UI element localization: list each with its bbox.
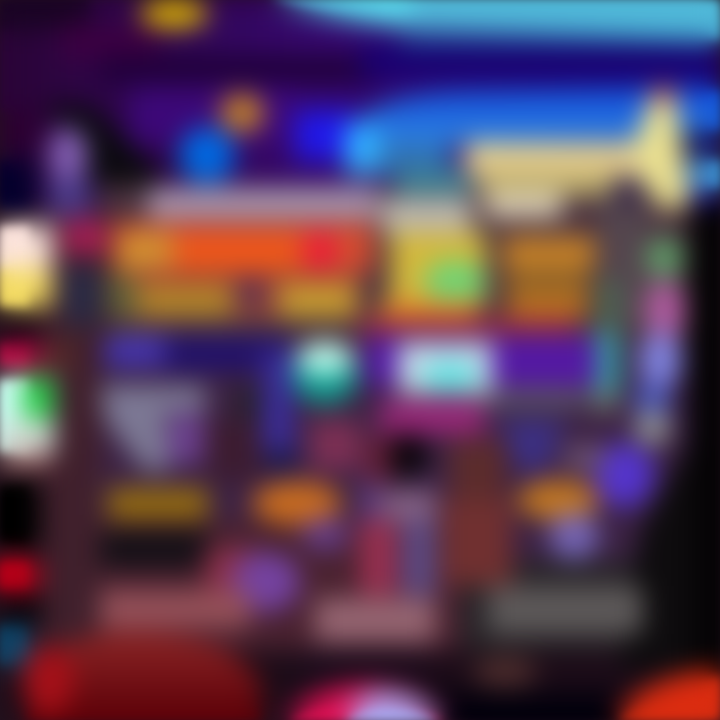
panel: marquee top	[148, 188, 378, 219]
background: cabinet body	[0, 185, 720, 720]
icon: right red dome	[614, 668, 720, 720]
panel: red and orange sign	[108, 222, 374, 318]
panel: left lower gap	[0, 600, 42, 667]
icon: centre red and white dome	[284, 684, 449, 720]
panel: white reel screen	[398, 342, 492, 394]
icon: cyan ceiling arc	[270, 0, 720, 45]
panel: gold topper	[465, 87, 690, 210]
panel: lower cabinet	[100, 420, 643, 688]
icon: large red stool	[22, 631, 262, 720]
icon: orange ceiling light	[220, 93, 264, 133]
icon: left red light	[0, 557, 43, 593]
background: dark diagonal beam	[40, 105, 165, 205]
panel: teal reel screen	[292, 342, 358, 404]
panel: left bright screen	[0, 224, 52, 308]
background: ceiling	[0, 0, 720, 210]
icon: blue neon arc	[345, 86, 720, 195]
panel: right side lights	[590, 180, 685, 507]
panel: dark floor gap	[300, 652, 620, 720]
panel: yellow centre sign	[380, 198, 486, 322]
panel: reel row	[100, 336, 605, 472]
panel: left green screen	[0, 374, 55, 469]
icon: yellow ceiling light	[140, 0, 208, 28]
panel: right black edge	[620, 205, 720, 720]
icon: blue ceiling light	[179, 127, 235, 183]
panel: gold right sign	[360, 193, 595, 332]
panel: left column	[0, 108, 106, 370]
panel: left dark gap	[0, 485, 40, 545]
panel: button row	[108, 480, 599, 560]
